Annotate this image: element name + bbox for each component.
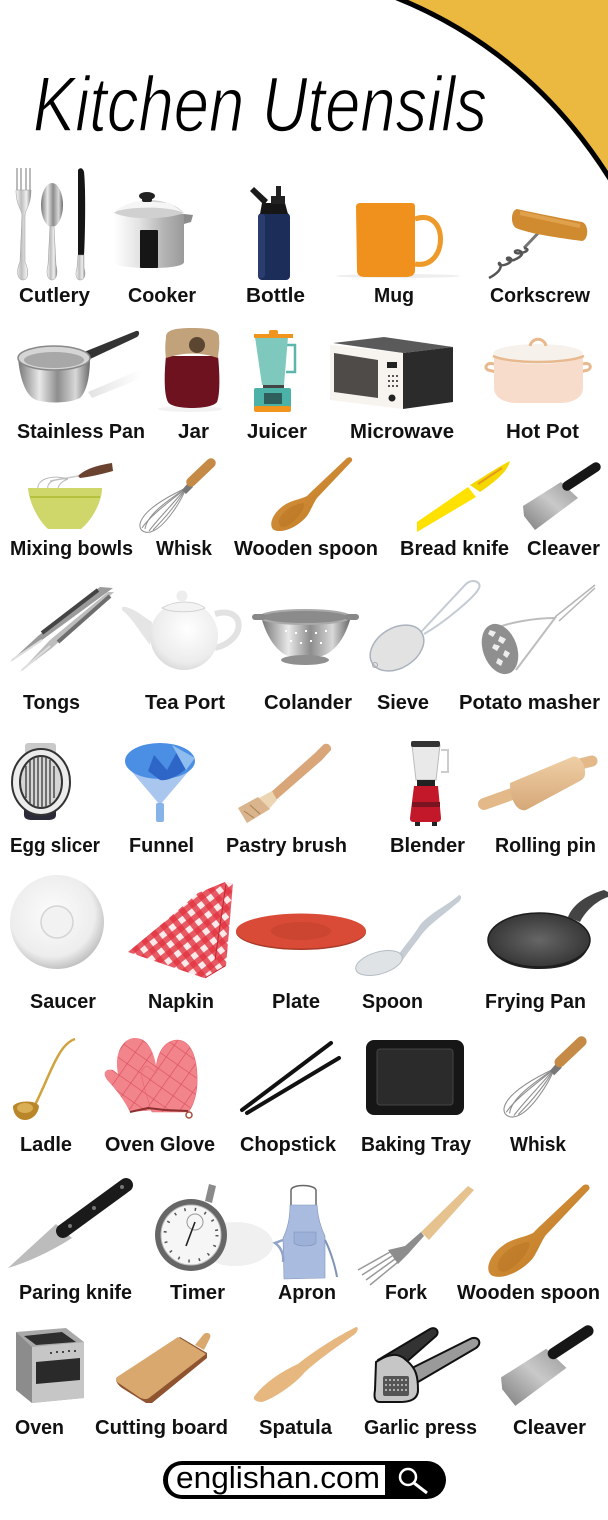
icon: microwave	[330, 337, 453, 409]
label: garlic press: Garlic press	[364, 1417, 477, 1439]
label: apron: Apron	[278, 1282, 336, 1304]
label: napkin: Napkin	[148, 991, 214, 1013]
icon: sieve	[362, 581, 480, 680]
icon: rolling pin	[484, 756, 592, 810]
label: oven: Oven	[15, 1417, 64, 1439]
label: egg slicer: Egg slicer	[10, 835, 100, 857]
label: ladle: Ladle	[20, 1134, 72, 1156]
label: baking tray: Baking Tray	[361, 1134, 472, 1156]
label: pastry brush: Pastry brush	[226, 835, 347, 857]
label: cooker: Cooker	[128, 285, 196, 307]
icon: bread knife	[417, 461, 510, 532]
icon: oven glove	[105, 1038, 197, 1118]
icon: juicer	[254, 330, 295, 412]
label: sieve: Sieve	[377, 692, 429, 714]
label: whisk: Whisk	[156, 538, 213, 560]
icon: cooker	[114, 192, 193, 268]
icon: mug	[336, 203, 460, 278]
label: cleaver: Cleaver	[513, 1417, 586, 1439]
label: saucer: Saucer	[30, 991, 96, 1013]
corner shape	[392, 0, 608, 182]
label: spatula: Spatula	[259, 1417, 333, 1439]
icon: timer	[155, 1184, 273, 1271]
icon: cutting board	[116, 1333, 210, 1403]
icon: corkscrew	[489, 209, 587, 278]
icon: cutlery	[16, 168, 85, 280]
label: fork: Fork	[385, 1282, 428, 1304]
icon: tongs	[10, 587, 114, 672]
label: wooden spoon: Wooden spoon	[234, 538, 378, 560]
label: tongs: Tongs	[23, 692, 80, 714]
label: hot pot: Hot Pot	[506, 421, 579, 443]
icon: paring knife	[8, 1185, 126, 1268]
icon: funnel	[125, 743, 195, 822]
label: jar: Jar	[178, 421, 209, 443]
icon: baking tray	[366, 1040, 464, 1115]
icon: garlic press	[375, 1328, 479, 1402]
icon: bottle	[250, 186, 290, 280]
label: plate: Plate	[272, 991, 320, 1013]
label: corkscrew: Corkscrew	[490, 285, 590, 307]
icon: wooden spoon	[488, 1184, 589, 1277]
icon: jar	[158, 328, 222, 412]
icon: plate	[236, 914, 366, 950]
label: mug: Mug	[374, 285, 414, 307]
icon: pastry brush	[238, 744, 331, 823]
label: spoon: Spoon	[362, 991, 423, 1013]
icon: potato masher	[475, 585, 595, 679]
label: bottle: Bottle	[246, 285, 305, 307]
label: mixing bowls: Mixing bowls	[10, 538, 133, 560]
label: potato masher: Potato masher	[459, 692, 600, 714]
icon: blender	[410, 741, 448, 826]
icon: tea pot	[122, 590, 239, 670]
icon: hot pot	[486, 339, 590, 403]
icon: cleaver	[523, 467, 596, 530]
icon: napkin	[128, 882, 233, 978]
icon: mixing bowl	[28, 463, 113, 529]
label: cutting board: Cutting board	[95, 1417, 228, 1439]
label: oven glove: Oven Glove	[105, 1134, 215, 1156]
label: stainless pan: Stainless Pan	[17, 421, 145, 443]
icon: whisk	[140, 463, 211, 532]
website search bar	[163, 1460, 446, 1499]
label: microwave: Microwave	[350, 421, 454, 443]
icon: apron	[275, 1186, 337, 1279]
title: Kitchen Utensils	[33, 60, 487, 148]
icon: spoon	[353, 895, 461, 980]
label: bread knife: Bread knife	[400, 538, 509, 560]
icon: cleaver	[501, 1331, 588, 1406]
label: wooden spoon: Wooden spoon	[457, 1282, 600, 1304]
label: colander: Colander	[264, 692, 352, 714]
icon: spatula	[254, 1327, 358, 1402]
label: chopstick: Chopstick	[240, 1134, 337, 1156]
icon: frying pan	[488, 890, 608, 969]
icon: egg slicer	[12, 743, 70, 820]
icon: oven	[16, 1328, 84, 1403]
icon: chopstick	[242, 1043, 339, 1113]
label: rolling pin: Rolling pin	[495, 835, 596, 857]
website search bar: englishan.com	[176, 1460, 380, 1495]
label: juicer: Juicer	[247, 421, 307, 443]
label: frying pan: Frying Pan	[485, 991, 586, 1013]
icon: stainless pan	[18, 331, 142, 402]
label: timer: Timer	[170, 1282, 225, 1304]
label: whisk: Whisk	[510, 1134, 567, 1156]
icon: wooden spoon	[271, 457, 352, 531]
icon: whisk	[504, 1041, 581, 1117]
label: paring knife: Paring knife	[19, 1282, 132, 1304]
label: cleaver: Cleaver	[527, 538, 600, 560]
icon: fork	[358, 1186, 474, 1285]
label: tea port: Tea Port	[145, 692, 225, 714]
label: cutlery: Cutlery	[19, 285, 91, 307]
icon: ladle	[13, 1039, 75, 1120]
icon: colander	[252, 610, 359, 665]
label: blender: Blender	[390, 835, 465, 857]
icon: saucer	[10, 875, 104, 969]
label: funnel: Funnel	[129, 835, 194, 857]
